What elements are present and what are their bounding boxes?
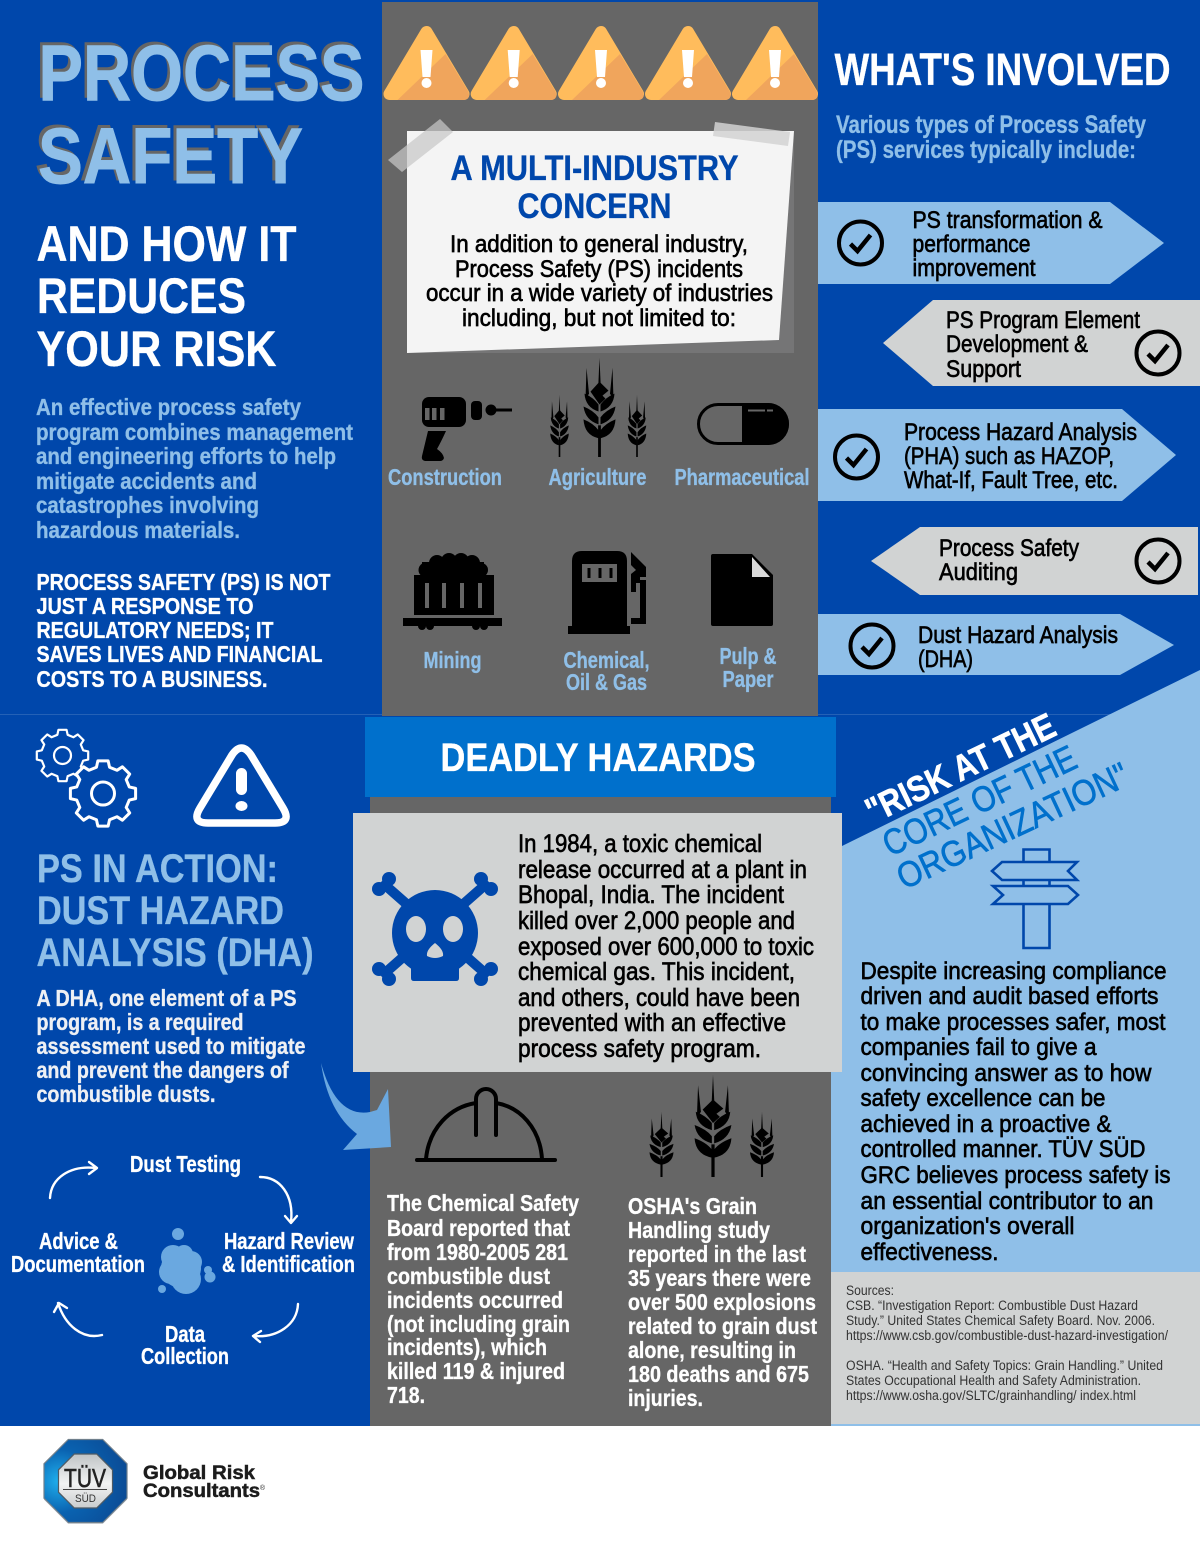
icon: dust cloud xyxy=(158,1228,216,1294)
intro text: hazardous materials. xyxy=(36,517,240,543)
text: risk paragraph: to make processes safer, most xyxy=(860,1009,1166,1036)
text: risk paragraph: controlled manner. TÜV SÜD xyxy=(860,1136,1146,1163)
logo wordmark: Global Risk xyxy=(143,1463,255,1484)
service arrow: ps transformation: improvement xyxy=(912,255,1036,282)
callout: not just regulatory: SAVES LIVES AND FINANCIAL xyxy=(36,641,322,667)
service arrow: ps transformation xyxy=(818,202,1164,284)
text: osha grain handling: 180 deaths and 675 xyxy=(628,1361,809,1387)
panel: bhopal callout xyxy=(353,813,842,1072)
cycle step labels: Data xyxy=(165,1321,205,1347)
text: services intro: (PS) services typically include: xyxy=(836,136,1136,164)
intro text: An effective process safety xyxy=(36,394,301,420)
service arrow: process safety auditing xyxy=(871,527,1198,595)
panel: deadly hazards gray column xyxy=(370,790,831,1426)
text: osha grain handling: injuries. xyxy=(628,1385,703,1411)
text: risk paragraph: effectiveness. xyxy=(860,1239,998,1266)
icon: document xyxy=(711,554,773,626)
subtitle: and how it reduces your risk: AND HOW IT xyxy=(36,216,296,272)
icon: hard hat xyxy=(417,1089,555,1160)
heading: risk at the core of the organization: ORGANIZATION" xyxy=(890,754,1135,897)
title: process safety: PROCESS xyxy=(38,28,364,117)
text: chemical safety board: combustible dust xyxy=(387,1263,550,1289)
card body text xyxy=(426,231,773,332)
cycle step labels xyxy=(11,1151,355,1369)
logo badge xyxy=(44,1440,127,1524)
text: dha description: combustible dusts. xyxy=(36,1081,216,1107)
card body text: In addition to general industry, xyxy=(450,231,748,258)
service arrow: ps program element xyxy=(883,300,1200,386)
service arrow: ps program element: PS Program Element xyxy=(946,307,1140,334)
text: chemical safety board: The Chemical Safety xyxy=(387,1190,579,1216)
icon: gears xyxy=(37,730,136,826)
industry labels: Oil & Gas xyxy=(566,669,647,695)
logo wordmark: ® xyxy=(260,1484,266,1492)
text: osha grain handling: related to grain dust xyxy=(628,1313,817,1339)
text: bhopal incident: and others, could have been xyxy=(518,984,800,1012)
industry labels: Construction xyxy=(388,464,502,490)
cycle step labels: Hazard Review xyxy=(224,1228,354,1254)
subtitle: and how it reduces your risk xyxy=(36,216,296,377)
text: chemical safety board: Board reported that xyxy=(387,1215,570,1241)
text: osha grain handling xyxy=(628,1193,817,1411)
text: risk paragraph xyxy=(860,958,1170,1266)
logo wordmark xyxy=(143,1463,266,1502)
industry labels: Pharmaceutical xyxy=(674,464,810,490)
section divider line xyxy=(0,714,1200,715)
text: bhopal incident: killed over 2,000 people and xyxy=(518,907,795,935)
icon: pill xyxy=(698,403,789,445)
industry labels: Agriculture xyxy=(548,464,646,490)
service arrow: process hazard analysis: What-If, Fault Tree, etc. xyxy=(904,467,1118,494)
title: process safety: PROCESS xyxy=(36,25,362,114)
icon: signpost xyxy=(992,850,1078,948)
text: dha description: assessment used to mitigate xyxy=(36,1033,306,1059)
text: risk paragraph: achieved in a proactive & xyxy=(860,1111,1112,1138)
service arrow: dust hazard analysis: Dust Hazard Analysis xyxy=(918,622,1118,649)
icon: fuel pump xyxy=(568,551,646,634)
text: risk paragraph: organization's overall xyxy=(860,1213,1074,1240)
card heading: A MULTI-INDUSTRY xyxy=(450,149,738,188)
text: osha grain handling: alone, resulting in xyxy=(628,1337,796,1363)
icon: drill xyxy=(422,397,512,461)
icons: warning triangles xyxy=(390,32,817,100)
card body text: Process Safety (PS) incidents xyxy=(455,256,743,283)
text: risk paragraph: driven and audit based efforts xyxy=(860,983,1158,1010)
logo: tuv sud global risk consultants xyxy=(44,1440,266,1524)
industry labels: Paper xyxy=(722,666,774,692)
service arrow: ps program element: Support xyxy=(946,356,1021,383)
text: bhopal incident: release occurred at a plant in xyxy=(518,856,807,884)
intro text: program combines management xyxy=(36,419,353,445)
heading: risk at the core of the organization xyxy=(859,705,1135,897)
text: chemical safety board: 718. xyxy=(387,1382,425,1408)
cycle step labels: Advice & xyxy=(39,1228,118,1254)
intro text xyxy=(36,394,353,543)
text: risk paragraph: Despite increasing compliance xyxy=(860,958,1166,985)
cycle arrows xyxy=(50,1162,298,1342)
text: chemical safety board xyxy=(387,1190,579,1408)
service arrow: ps transformation: PS transformation & xyxy=(912,207,1102,234)
text: bhopal incident: Bhopal, India. The incident xyxy=(518,881,784,909)
callout: not just regulatory: JUST A RESPONSE TO xyxy=(36,593,254,619)
cycle step labels: Documentation xyxy=(11,1251,145,1277)
text: risk paragraph: an essential contributor to an xyxy=(860,1188,1154,1215)
panel: sources: https://www.osha.gov/SLTC/grainhandling/ index.html xyxy=(846,1388,1136,1403)
card heading: CONCERN xyxy=(518,187,672,226)
service arrow: process hazard analysis: (PHA) such as HAZOP, xyxy=(904,443,1114,470)
text: chemical safety board: incidents), which xyxy=(387,1334,547,1360)
industry labels: Pulp & xyxy=(720,643,776,669)
text: risk paragraph: companies fail to give a xyxy=(860,1034,1097,1061)
text: chemical safety board: incidents occurred xyxy=(387,1287,563,1313)
banner: deadly hazards: DEADLY HAZARDS xyxy=(440,736,756,780)
callout: not just regulatory: REGULATORY NEEDS; IT xyxy=(36,617,274,643)
text: chemical safety board: (not including grain xyxy=(387,1311,570,1337)
service arrow: process safety auditing: Auditing xyxy=(939,559,1018,586)
text: osha grain handling: over 500 explosions xyxy=(628,1289,816,1315)
text: chemical safety board: from 1980-2005 281 xyxy=(387,1239,568,1265)
industry labels: Mining xyxy=(424,647,482,673)
panel: sources: Sources: xyxy=(846,1283,894,1298)
text: risk paragraph: convincing answer as to how xyxy=(860,1060,1152,1087)
intro text: catastrophes involving xyxy=(36,492,259,518)
text: bhopal incident: chemical gas. This incident, xyxy=(518,958,795,986)
intro text: mitigate accidents and xyxy=(36,468,257,494)
panel: industries gray column xyxy=(382,2,818,716)
icon: skull and crossbones xyxy=(372,872,498,986)
heading: ps in action xyxy=(36,847,314,975)
cycle step labels: & Identification xyxy=(222,1251,355,1277)
heading: risk at the core of the organization: "RISK AT THE xyxy=(859,705,1062,831)
icon: warning outline xyxy=(197,748,286,823)
text: dha description: and prevent the dangers of xyxy=(36,1057,289,1083)
cycle step labels: Dust Testing xyxy=(130,1151,241,1177)
panel: sources: OSHA. “Health and Safety Topics: Grain Handling.” United xyxy=(846,1358,1163,1373)
industry labels: Chemical, xyxy=(564,647,650,673)
panel: sources: Study.” United States Chemical Safety Board. Nov. 2006. xyxy=(846,1313,1155,1328)
intro text: and engineering efforts to help xyxy=(36,443,336,469)
note card: a multi-industry concern xyxy=(388,119,794,353)
title: process safety: SAFETY xyxy=(38,111,303,200)
service arrow: process hazard analysis: Process Hazard Analysis xyxy=(904,419,1137,446)
panel: sources xyxy=(831,1272,1200,1426)
text: osha grain handling: OSHA's Grain xyxy=(628,1193,757,1219)
industry labels xyxy=(388,464,810,695)
service arrow: ps transformation: performance xyxy=(912,231,1030,258)
text: bhopal incident: prevented with an effective xyxy=(518,1009,786,1037)
panel: sources: CSB. “Investigation Report: Combustible Dust Hazard xyxy=(846,1298,1138,1313)
service arrow: dust hazard analysis xyxy=(818,614,1174,675)
cycle diagram: dha steps xyxy=(11,1151,355,1369)
arrow: curved pointer to hazards xyxy=(321,1063,391,1150)
callout: not just regulatory: PROCESS SAFETY (PS) IS NOT xyxy=(36,569,331,595)
text: risk paragraph: GRC believes process safety is xyxy=(860,1162,1170,1189)
logo badge: SÜD xyxy=(75,1493,96,1505)
service arrow: dust hazard analysis: (DHA) xyxy=(918,646,973,673)
panel: sources: States Occupational Health and Safety Administration. xyxy=(846,1373,1141,1388)
heading: ps in action: ANALYSIS (DHA) xyxy=(36,931,314,975)
text: risk paragraph: safety excellence can be xyxy=(860,1085,1106,1112)
text: dha description xyxy=(36,985,306,1107)
heading: ps in action: DUST HAZARD xyxy=(37,889,284,933)
title: process safety xyxy=(35,25,364,200)
card body text: including, but not limited to: xyxy=(462,305,736,332)
icon: wheat agriculture xyxy=(550,358,646,457)
icon: mine cart xyxy=(403,553,502,630)
panel: sources: https://www.csb.gov/combustible-dust-hazard-investigation/ xyxy=(846,1328,1168,1343)
cycle step labels: Collection xyxy=(141,1343,229,1369)
callout: not just regulatory: COSTS TO A BUSINESS. xyxy=(36,666,268,692)
subtitle: and how it reduces your risk: REDUCES xyxy=(37,268,246,324)
text: dha description: program, is a required xyxy=(36,1009,244,1035)
text: services intro xyxy=(836,111,1146,164)
text: bhopal incident xyxy=(518,830,814,1063)
service arrow: ps program element: Development & xyxy=(946,331,1088,358)
card body text: occur in a wide variety of industries xyxy=(426,280,773,307)
title: process safety: SAFETY xyxy=(35,108,300,197)
heading: ps in action: PS IN ACTION: xyxy=(37,847,278,891)
card heading xyxy=(450,149,738,226)
banner: deadly hazards xyxy=(365,717,836,797)
service arrow: process safety auditing: Process Safety xyxy=(939,535,1079,562)
logo badge: TÜV xyxy=(64,1463,107,1493)
callout: not just regulatory xyxy=(36,569,331,692)
panel: risk at the core xyxy=(831,670,1200,1272)
text: osha grain handling: reported in the last xyxy=(628,1241,806,1267)
text: bhopal incident: In 1984, a toxic chemical xyxy=(518,830,762,858)
text: chemical safety board: killed 119 & injured xyxy=(387,1358,565,1384)
icon: wheat grain xyxy=(650,1075,774,1177)
service arrow: process hazard analysis xyxy=(818,409,1176,501)
text: osha grain handling: 35 years there were xyxy=(628,1265,811,1291)
heading: risk at the core of the organization: CORE OF THE xyxy=(876,737,1083,864)
text: osha grain handling: Handling study xyxy=(628,1217,770,1243)
text: bhopal incident: exposed over 600,000 to toxic xyxy=(518,933,814,961)
text: dha description: A DHA, one element of a PS xyxy=(36,985,296,1011)
subtitle: and how it reduces your risk: YOUR RISK xyxy=(36,321,276,377)
text: bhopal incident: process safety program. xyxy=(518,1035,761,1063)
logo wordmark: Consultants xyxy=(143,1481,260,1502)
